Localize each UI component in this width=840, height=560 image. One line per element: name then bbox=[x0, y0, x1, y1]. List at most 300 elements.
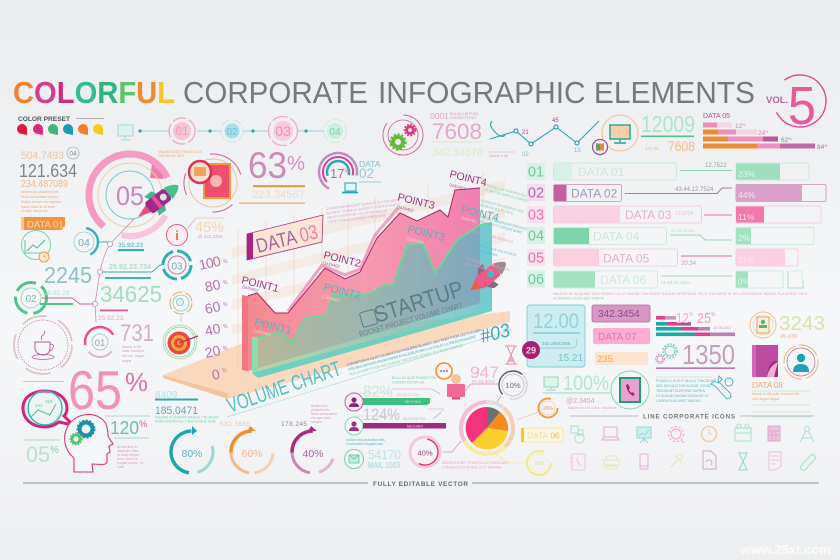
chart axis labels: % bbox=[223, 280, 228, 286]
big 65 percent with head: 05 bbox=[26, 442, 50, 467]
data 08 document: Mauris in elit nulla, tincidunt elit bbox=[752, 392, 799, 396]
stacked bars data 05: 62 bbox=[781, 137, 788, 144]
data table bbox=[527, 163, 826, 300]
footer rule: FULLY EDITABLE VECTOR bbox=[373, 481, 468, 488]
gauge 80 percent bbox=[166, 426, 218, 478]
stat 100 percent: @2.3454 bbox=[566, 398, 595, 405]
icons heading: LINE CORPORATE ICONS bbox=[643, 414, 735, 420]
row 03 bbox=[527, 206, 821, 224]
stacked bars data 05: 12 bbox=[735, 123, 742, 130]
stacked bars data 05: % bbox=[742, 123, 745, 127]
row 124 percent: 20.92.23.734 bbox=[403, 417, 425, 421]
ring 01 with 731: elit non, augue bbox=[122, 354, 144, 358]
volume chart: DATA402 bbox=[461, 215, 479, 224]
gears 7608: CONSECTETUR bbox=[450, 116, 476, 120]
table footnote: ULTRICIES LACUS SED TURPIS bbox=[553, 296, 605, 300]
row 04: DATA 04 bbox=[593, 230, 640, 244]
data 01 tag bbox=[21, 217, 65, 230]
big 65 percent with head: Ut faucibus in bbox=[117, 445, 138, 449]
avatar with speech bubble bbox=[436, 363, 499, 400]
row 01: 23% bbox=[738, 169, 755, 179]
rocket ring 05: 05 bbox=[116, 181, 144, 211]
icon: calculator bbox=[768, 426, 780, 441]
ring 02 link: 02 bbox=[25, 294, 37, 305]
big 65 percent with head: feugiat ornare. Ut bbox=[117, 461, 143, 465]
stacked bars 12 25 percent: 25 bbox=[697, 310, 711, 327]
progress rows: Nullam nisl phasellus felis bbox=[346, 438, 385, 442]
row 82 percent: MICHIKO bbox=[405, 400, 421, 404]
icon: printer bbox=[604, 456, 619, 469]
ring 02 link: 25.92.23 bbox=[44, 290, 70, 297]
stacked bars data 05: % bbox=[788, 137, 791, 141]
value tags: 235 bbox=[597, 354, 613, 365]
chart axis labels bbox=[197, 253, 228, 383]
row 02: 43.44.12.7524 bbox=[675, 187, 714, 193]
monitor panel 12009: 12009 bbox=[641, 111, 695, 137]
stat 3243: 45.436 bbox=[780, 334, 797, 340]
row 06: 06 bbox=[528, 272, 544, 288]
text and wrench: LOREM DUIS AMET MAGNA bbox=[656, 399, 701, 403]
point labels: POINT2 bbox=[322, 249, 362, 270]
text and wrench bbox=[656, 376, 733, 403]
left numbers block: ut vitae dictum leo bbox=[21, 209, 48, 213]
stacked bars 12 25 percent: % bbox=[711, 312, 716, 318]
pie chart: CONSECTETUR NISL ELIT MAGNA bbox=[442, 466, 502, 470]
title: INFOGRAPHIC ELEMENTS bbox=[378, 75, 755, 110]
right notes: ELEIFEND SAPIEN bbox=[468, 246, 498, 258]
stacked bars data 05: DATA 05 bbox=[703, 113, 730, 120]
left numbers block: 504.7493 bbox=[21, 150, 64, 162]
note near volume gauges: Nunc consectetur bbox=[311, 412, 338, 416]
ring 01 with 731: Mauris in elit bbox=[122, 345, 141, 349]
progress rows bbox=[344, 376, 446, 470]
icon: cubes bbox=[571, 426, 584, 443]
big 65 percent with head: urna. Nunc ut bbox=[117, 457, 137, 461]
hourglass bbox=[505, 346, 517, 364]
icon: note bbox=[769, 452, 781, 470]
row 05: 05 bbox=[528, 250, 544, 266]
right notes: SCELERISQUE UT bbox=[464, 261, 493, 273]
speech bubble bbox=[23, 391, 73, 427]
speech bubble: 341 bbox=[35, 403, 43, 408]
stat 100 percent: Mauris in elit nulla, tincidunt bbox=[568, 406, 616, 410]
icon: address book bbox=[611, 371, 649, 409]
volume chart: POINT1 bbox=[253, 316, 293, 337]
gauge 60 percent: 532.3658 bbox=[220, 421, 250, 428]
icon: target bbox=[163, 325, 198, 359]
gears 1350: 1350 bbox=[682, 339, 735, 370]
row 06: 01.04.52.1521 bbox=[661, 280, 691, 285]
row 82 percent bbox=[345, 382, 430, 411]
data 08 document: non, augue augue bbox=[752, 397, 779, 401]
ring 03 link: 25.92.23.734 bbox=[109, 264, 151, 271]
right notes: ELEMENTUM SEMPER NISI bbox=[481, 199, 524, 214]
left numbers block: 04 bbox=[69, 150, 77, 158]
time card bbox=[522, 305, 585, 367]
icon panel: 63 percent: 63 bbox=[248, 145, 287, 186]
gears 7608: 0001 bbox=[430, 111, 449, 121]
gauge 40 percent bbox=[281, 421, 340, 479]
row 02: 02 bbox=[528, 186, 544, 202]
row 04: 22.33.12.334 bbox=[671, 228, 695, 233]
point labels: POINT4 bbox=[448, 168, 488, 189]
chart axis labels: 60 bbox=[203, 298, 222, 317]
row 82 percent: 82% bbox=[363, 382, 393, 401]
17 percent donut: DATA bbox=[359, 159, 381, 169]
row 04: 2% bbox=[738, 233, 751, 243]
chart axis labels: 0 bbox=[210, 366, 221, 383]
chart axis labels: % bbox=[223, 324, 228, 330]
icon panel: 63 percent: 223.34567 bbox=[252, 189, 305, 201]
data 01 tag: DATA 01 bbox=[27, 220, 64, 230]
row 05: 21% bbox=[738, 255, 755, 265]
right notes: AENEAN VULPUTATE bbox=[479, 203, 514, 216]
step timeline: 03 bbox=[275, 123, 291, 139]
avatar with speech bubble: 07.24.2017 bbox=[472, 379, 495, 384]
left numbers block: Neque semper dui egestas bbox=[21, 200, 62, 204]
icon: briefcase bbox=[735, 424, 751, 441]
gears 7608 bbox=[377, 109, 483, 161]
ring 30 percent bbox=[500, 451, 551, 475]
chart axis labels: 80 bbox=[203, 276, 222, 295]
icon: monitor bbox=[118, 125, 133, 140]
side note: FELIS PORTTITOR VOLUTPAT NULLA bbox=[327, 209, 387, 220]
volume chart bbox=[163, 168, 537, 418]
gears 1350 bbox=[656, 339, 735, 370]
title: CORPORATE bbox=[183, 75, 368, 110]
pie chart: MAURIS EGET PHASELLUS TINCIDUNT bbox=[442, 461, 510, 465]
row 124 percent bbox=[345, 405, 446, 435]
stacked bars 12 25 percent bbox=[656, 310, 735, 336]
data 08 document: DATA 08 bbox=[752, 381, 783, 390]
icon: user ring bbox=[784, 345, 818, 379]
time card: 29 bbox=[526, 346, 536, 356]
title note: CURABITUR ALIQUET QUAM ID DUI POSUERE BLANDIT. SED PORTTITOR LECTUS NIBH. bbox=[346, 328, 483, 367]
point labels: POINT1 bbox=[240, 274, 280, 295]
icon panel: 63 percent bbox=[158, 143, 305, 223]
title note: VESTIBULUM ANTE IPSUM PRIMIS IN FAUCIBUS ORCI LUCTUS ET ULTRICES POSUERE bbox=[348, 335, 477, 372]
chart axis labels: 20 bbox=[203, 342, 222, 361]
row 03: 03 bbox=[528, 208, 544, 224]
row 03: 12.6724 bbox=[675, 211, 693, 217]
step timeline: 04 bbox=[329, 127, 341, 138]
big 65 percent with head: % bbox=[50, 445, 59, 456]
ring 40 percent: 40% bbox=[417, 448, 433, 458]
45 percent info: i bbox=[175, 228, 179, 243]
ring 03 link: 03 bbox=[171, 262, 183, 272]
volume chart: DATA402 bbox=[254, 328, 272, 337]
ring 01 with 731: nulla, tincidunt bbox=[122, 349, 144, 353]
icon: compass bbox=[800, 426, 814, 442]
watermark: www.25xt.com bbox=[740, 542, 831, 557]
icon: gear bbox=[668, 426, 684, 443]
vol 5 badge: 5 bbox=[788, 76, 816, 136]
step timeline: 01 bbox=[175, 124, 189, 138]
ring 01 with 731: 01 bbox=[95, 338, 105, 349]
right notes: A LIBERO FUSCE VULPUTATE bbox=[469, 241, 518, 258]
icon: coffee cup bbox=[14, 316, 72, 374]
row 01: 12.7522 bbox=[705, 163, 727, 169]
45 percent info: @ 342.3454 bbox=[198, 234, 223, 239]
table footnote: MAURIS IN ALIQUAM SEM FRINGILLA UT MORBI TINCIDUNT AUGUE INTERDUM VELIT EUISMOD IN PELLENTESQUE MASSA PLACERAT DUIS bbox=[553, 292, 808, 296]
side note: BLANDIT. VIVAMUS SUSCIPIT TORTOR EGET bbox=[326, 203, 399, 215]
stacked bars data 05: 24 bbox=[758, 130, 765, 137]
ring 04: 04 bbox=[78, 237, 90, 249]
icon: presentation bbox=[637, 427, 651, 443]
volume chart title: VOLUME CHART bbox=[224, 357, 344, 418]
stat 185.0471: 8409 bbox=[155, 390, 178, 401]
icon: address book outline bbox=[570, 454, 585, 470]
right notes: UT METUS VARIUS LAOREET bbox=[484, 187, 530, 204]
icon: chart rocket bbox=[462, 252, 514, 301]
right notes: LEO EGET BIBENDUM SODALES bbox=[476, 214, 529, 232]
stat 185.0471 bbox=[155, 390, 219, 424]
ring 03 link bbox=[102, 251, 191, 279]
value tags bbox=[592, 305, 650, 365]
icon: pin bbox=[670, 454, 682, 468]
line chart: 21 bbox=[522, 130, 529, 136]
row 01: 01 bbox=[528, 164, 544, 180]
ring 01 with 731: 731 bbox=[120, 320, 154, 347]
mail bbox=[344, 447, 401, 470]
step timeline: 02 bbox=[226, 127, 238, 138]
chart axis labels: % bbox=[223, 259, 228, 265]
icon: rocket bbox=[131, 176, 186, 226]
stacked bars 12 25 percent: 12 bbox=[676, 310, 689, 327]
data 03 tag: DATA 03 bbox=[254, 221, 320, 258]
big 65 percent with head: % bbox=[125, 367, 148, 397]
side note: PORTTITOR ACCUMSAN TINCIDUNT bbox=[327, 213, 386, 224]
big 65 percent with head: % bbox=[139, 419, 148, 430]
left numbers block: Nullam dui phasellus fide bbox=[21, 190, 59, 194]
title: COLORFUL bbox=[13, 75, 175, 110]
note near volume gauges: vis eget risus bbox=[311, 416, 331, 420]
icon panel: 63 percent: TINCIDUNT SED bbox=[158, 154, 185, 158]
point labels bbox=[240, 168, 488, 295]
vol 5 badge bbox=[764, 65, 836, 137]
row 02: DATA 02 bbox=[571, 186, 618, 200]
side note bbox=[326, 198, 403, 224]
mail: MAIL 1003 bbox=[368, 461, 400, 470]
time card: 342.34543369 bbox=[542, 341, 571, 346]
chart axis labels: 100 bbox=[197, 253, 222, 273]
row 02: 44% bbox=[738, 190, 755, 200]
volume chart: DATA402 bbox=[407, 236, 425, 245]
gears 7608: 342.34578 bbox=[432, 147, 483, 159]
ring 04 bbox=[68, 226, 144, 258]
row 01 bbox=[527, 163, 809, 180]
chart axis labels: 40 bbox=[203, 320, 222, 339]
17 percent donut bbox=[312, 146, 381, 198]
ring 02 link bbox=[16, 282, 93, 314]
volume chart: DATA402 bbox=[323, 260, 341, 269]
ring 01 with 731: augue bbox=[122, 359, 132, 363]
progress rows: BULLUM QUIS PHASETTRA bbox=[392, 376, 437, 380]
progress rows: Consectetur feugiat cras bbox=[346, 442, 383, 446]
table footnote bbox=[553, 292, 808, 300]
ring 26 percent: 26% bbox=[543, 406, 554, 412]
text and wrench: PHASELLUS ELIT NULLA, TINCIDUNT bbox=[656, 379, 716, 383]
startup label bbox=[358, 275, 466, 339]
text and wrench: SED NISI AUCTOR AUGUE. DONEC bbox=[656, 384, 713, 388]
gears bbox=[70, 420, 94, 445]
gauge 40 percent: 40% bbox=[302, 448, 324, 460]
volume chart: DATA402 bbox=[242, 284, 260, 293]
icon panel: 63 percent: MAURIS EGET PHASELLUS bbox=[158, 150, 203, 154]
note near volume gauges: Bullam nisi bbox=[311, 404, 328, 408]
row 05 bbox=[527, 249, 798, 267]
right notes bbox=[464, 183, 537, 279]
gears 7608: BULUM LIB PHAS bbox=[450, 112, 479, 116]
pie chart bbox=[442, 391, 524, 470]
data 08 document bbox=[752, 345, 810, 417]
icon: growth chart and clock bbox=[22, 230, 50, 262]
volume chart: DATA402 bbox=[449, 182, 467, 191]
17 percent donut: 17 bbox=[330, 166, 344, 181]
ring 10 percent bbox=[493, 365, 533, 405]
stacked bars 12 25 percent: 10.08.2017 bbox=[713, 326, 732, 330]
floor bbox=[163, 311, 510, 399]
color preset: COLOR PRESET bbox=[18, 116, 70, 123]
stat 100 percent bbox=[543, 371, 649, 410]
stat 185.0471: MAURIS PLACERAT MAGNA TINCIDUNT bbox=[155, 416, 219, 420]
ring 40 percent bbox=[410, 437, 461, 467]
17 percent donut: % bbox=[344, 169, 350, 175]
startup label: STARTUP bbox=[371, 275, 466, 328]
icon: attachment document bbox=[703, 451, 716, 469]
right notes: PHASELLUS VIVERRA NULLA bbox=[485, 183, 532, 199]
line chart bbox=[488, 118, 599, 158]
left numbers block: 234.487089 bbox=[21, 179, 68, 190]
volume chart: POINT3 bbox=[406, 223, 446, 244]
stacked bars 12 25 percent: % bbox=[689, 312, 694, 318]
back grid bbox=[232, 180, 505, 335]
right notes: QUIS GRAVIDA MAGNA MI bbox=[472, 229, 514, 244]
ring 10 percent: 10% bbox=[505, 381, 521, 390]
line chart: 02 bbox=[522, 152, 529, 158]
note near volume gauges: phasella elis bbox=[311, 408, 330, 412]
data 06 tag bbox=[521, 428, 563, 442]
volume chart: POINT2 bbox=[322, 281, 362, 302]
value 25.92.23: 25.92.23. bbox=[98, 315, 125, 322]
row 124 percent: 124% bbox=[363, 405, 400, 424]
chart axis labels: % bbox=[223, 346, 228, 352]
row 04 bbox=[527, 227, 814, 244]
mail: 54170 bbox=[368, 447, 401, 462]
text and wrench: TINCIDUNT ELEIFEND SAPIEN bbox=[656, 389, 706, 393]
left numbers block: ipsum dolor fa sit amet bbox=[21, 205, 55, 209]
left numbers block bbox=[19, 147, 79, 213]
note near volume gauges bbox=[311, 404, 338, 424]
monitor panel 12009 bbox=[592, 111, 695, 154]
row 01: DATA 01 bbox=[578, 165, 625, 179]
head outline bbox=[65, 414, 113, 472]
icon: hourglass outline bbox=[738, 453, 748, 470]
17 percent donut: 02 bbox=[359, 165, 374, 181]
volume chart: DATA402 bbox=[397, 204, 415, 213]
red series bbox=[242, 295, 248, 371]
teal series bbox=[252, 337, 258, 374]
45 percent info bbox=[166, 218, 224, 246]
45 percent info: 45% bbox=[195, 219, 224, 236]
big 65 percent with head: 65 bbox=[68, 359, 122, 421]
row 02 bbox=[527, 184, 826, 202]
row 06 bbox=[527, 270, 803, 288]
value tags: 342.3454 bbox=[598, 309, 640, 320]
line chart: 45 bbox=[552, 118, 559, 124]
stacked bars data 05: % bbox=[765, 130, 768, 134]
ring 30 percent: 30% bbox=[534, 461, 545, 467]
value 2245: 2245 bbox=[44, 262, 92, 288]
gauge 40 percent: 178.245 bbox=[281, 421, 307, 428]
stacked bars data 05: % bbox=[824, 144, 827, 148]
icon: paper clip bbox=[801, 455, 815, 470]
icon: laptop bbox=[602, 427, 619, 440]
startup label: ROCKET PROJECT VOLUME CHART bbox=[358, 301, 464, 339]
icon: clock bbox=[702, 426, 716, 442]
row 05: DATA 05 bbox=[603, 252, 650, 266]
chart axis labels: % bbox=[223, 302, 228, 308]
text and wrench: UT AUGUE MAGNA SODALES UT bbox=[656, 394, 709, 398]
point labels: POINT3 bbox=[396, 191, 436, 212]
row 06: DATA 06 bbox=[600, 273, 647, 287]
right notes: AUGUE VELIT CURSUS NUNC bbox=[475, 218, 524, 235]
ring 26 percent bbox=[517, 398, 558, 420]
volume chart: DATA402 bbox=[323, 294, 341, 303]
row 04: 04 bbox=[528, 228, 544, 244]
time card: 12.00 bbox=[533, 310, 579, 333]
value tags: DATA 07 bbox=[598, 332, 637, 343]
stat 100 percent: 100% bbox=[563, 372, 609, 395]
time card: 15.21 bbox=[558, 353, 583, 364]
big 65 percent with head bbox=[23, 359, 150, 472]
stat 3243: 3243 bbox=[779, 313, 825, 335]
volume chart: POINT4 bbox=[460, 203, 500, 224]
speech bubble: 323 bbox=[45, 399, 53, 404]
right notes: VESTIBULUM PURUS QUAM bbox=[465, 257, 510, 272]
icon panel: 63 percent: % bbox=[287, 153, 305, 175]
value 34625: 34625 bbox=[100, 281, 162, 307]
row 82 percent: 05.02.23.724 bbox=[397, 393, 419, 397]
gauge 60 percent: 60% bbox=[241, 448, 263, 460]
line chart: Mauris in elit bbox=[489, 154, 508, 158]
title bbox=[13, 75, 755, 110]
vol 5 badge: VOL. bbox=[766, 95, 788, 106]
monitor panel 12009: 437.00 bbox=[645, 146, 659, 151]
avatar with speech bubble: 947 bbox=[470, 363, 499, 382]
big 65 percent with head: dignissim felis bbox=[117, 449, 138, 453]
row 05: 20.34 bbox=[681, 261, 697, 267]
stacked bars data 05: 84 bbox=[817, 144, 824, 151]
line chart: 13 bbox=[574, 148, 581, 154]
stat 185.0471: 185.0471 bbox=[155, 405, 198, 417]
value 25.92.23 bbox=[98, 310, 128, 322]
gears 7608: 7608 bbox=[432, 119, 482, 144]
row 03: 11% bbox=[738, 212, 755, 222]
icon: line set bbox=[570, 424, 815, 470]
icon: phone bbox=[640, 454, 648, 469]
rocket ring 05 bbox=[72, 137, 188, 253]
step timeline bbox=[118, 116, 346, 146]
data 06 tag: DATA 06 bbox=[527, 430, 560, 440]
monitor panel 12009: 7608 bbox=[668, 138, 695, 154]
icon: lightbulb ring bbox=[170, 292, 192, 322]
color preset bbox=[17, 116, 104, 135]
stacked bars data 05 bbox=[703, 113, 827, 151]
row 06: 0% bbox=[738, 278, 750, 286]
big 65 percent with head: nulla bbox=[117, 465, 124, 469]
gauge 80 percent: 80% bbox=[181, 448, 203, 460]
